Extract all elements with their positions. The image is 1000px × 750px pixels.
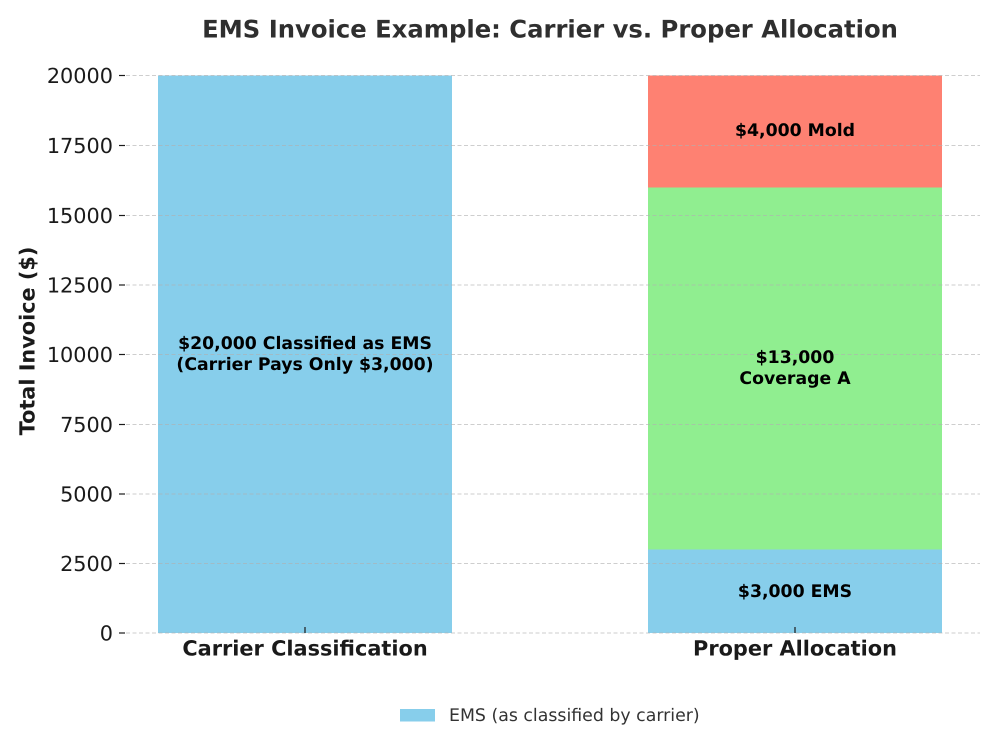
y axis: 5000 [60, 482, 113, 506]
legend: EMS (as classified by carrier) [449, 706, 700, 726]
y axis: 10000 [47, 343, 113, 367]
y axis: 0 [100, 622, 113, 646]
bar label: carrier [176, 334, 434, 375]
segment label: coverage A: $13,000 [756, 348, 834, 368]
segment label: coverage A [739, 348, 851, 389]
y axis title: Total Invoice ($) [16, 247, 40, 435]
y axis: 2500 [60, 552, 113, 576]
bar label: carrier: $20,000 Classified as EMS [178, 334, 432, 354]
title: EMS Invoice Example: Carrier vs. Proper Allocation [202, 14, 898, 44]
bar: carrier classification [158, 76, 452, 633]
bar: proper allocation [648, 76, 942, 633]
x axis labels: Proper Allocation [693, 636, 897, 660]
segment label: EMS: $3,000 EMS [738, 582, 852, 602]
x axis labels: Carrier Classification [182, 636, 428, 660]
x axis labels [182, 627, 897, 660]
segment label: mold: $4,000 Mold [735, 121, 855, 141]
y axis: 17500 [47, 134, 113, 158]
y axis [47, 64, 125, 646]
y axis: 15000 [47, 204, 113, 228]
segment label: coverage A: Coverage A [739, 369, 851, 389]
y axis: 7500 [60, 413, 113, 437]
y axis: 12500 [47, 274, 113, 298]
y axis: 20000 [47, 64, 113, 88]
bar label: carrier: (Carrier Pays Only $3,000) [176, 355, 434, 375]
